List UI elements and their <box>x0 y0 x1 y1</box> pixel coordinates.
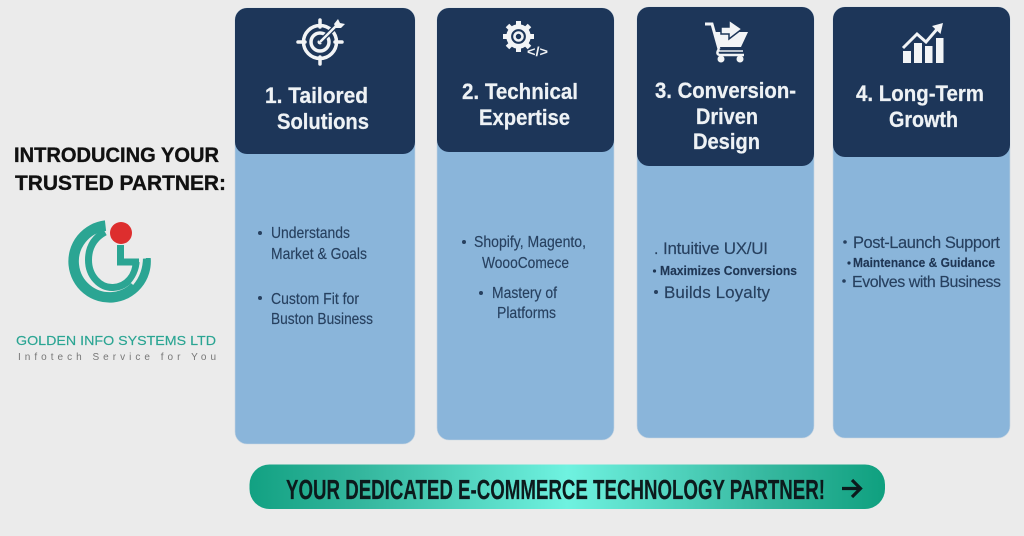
intro heading <box>14 144 226 195</box>
bullet list: Intuitive UX/UI <box>663 239 768 258</box>
bullet list: Understands <box>271 225 350 242</box>
heading: Design <box>693 129 760 154</box>
bullet list: Post-Launch Support <box>853 234 1000 252</box>
heading: 1. Tailored <box>265 83 368 108</box>
bullet list: Evolves with Business <box>852 274 1001 291</box>
panel: tailored solutions <box>235 8 415 444</box>
heading: 3. Conversion- <box>655 78 796 103</box>
bullet list: Custom Fit for <box>271 291 360 308</box>
icon: gear with code: </> <box>527 45 548 59</box>
arrow <box>842 480 860 497</box>
bullet list <box>462 234 586 322</box>
bullet list: Platforms <box>497 305 556 322</box>
company tagline: Infotech Service for You <box>18 352 216 363</box>
heading <box>265 83 369 134</box>
heading: Expertise <box>479 105 570 130</box>
panel body <box>833 7 1010 438</box>
panel body <box>437 8 614 440</box>
icon: growth chart <box>903 23 944 63</box>
heading <box>655 78 796 154</box>
icon: target with arrow <box>298 19 345 64</box>
intro heading: TRUSTED PARTNER: <box>15 172 226 195</box>
icon: gear with code <box>503 21 548 59</box>
heading <box>462 79 578 130</box>
heading: Growth <box>889 107 958 132</box>
company name: GOLDEN INFO SYSTEMS LTD <box>16 333 216 348</box>
bullet list: . <box>654 241 658 258</box>
bullet list: Mastery of <box>492 285 557 302</box>
panel header <box>437 8 614 152</box>
panel header <box>833 7 1010 157</box>
bullet list: Maintenance & Guidance <box>853 256 995 270</box>
panel: conversion-driven design <box>637 7 814 438</box>
panel body <box>235 8 415 444</box>
bullet list: Market & Goals <box>271 246 367 263</box>
panel header <box>235 8 415 154</box>
bullet list: Builds Loyalty <box>664 283 770 302</box>
heading: 4. Long-Term <box>856 81 984 106</box>
logo: Golden Info Systems mark <box>74 222 150 297</box>
heading: 2. Technical <box>462 79 578 104</box>
bullet list <box>842 234 1001 291</box>
panel header <box>637 7 814 166</box>
intro heading: INTRODUCING YOUR <box>14 144 219 167</box>
bullet list: WoooComece <box>482 255 569 272</box>
panel: long-term growth <box>833 7 1010 438</box>
bullet list: Maximizes Conversions <box>660 264 797 278</box>
bullet list: Shopify, Magento, <box>474 234 586 251</box>
bullet list <box>653 239 797 302</box>
icon: shopping cart with arrow <box>705 20 748 62</box>
panel body <box>637 7 814 438</box>
heading <box>856 81 984 132</box>
banner: dedicated partner <box>250 464 885 509</box>
heading: Solutions <box>277 109 369 134</box>
bullet list: Buston Business <box>271 311 373 328</box>
heading: Driven <box>696 104 758 129</box>
panel: technical expertise <box>437 8 614 440</box>
bullet list <box>258 225 373 328</box>
